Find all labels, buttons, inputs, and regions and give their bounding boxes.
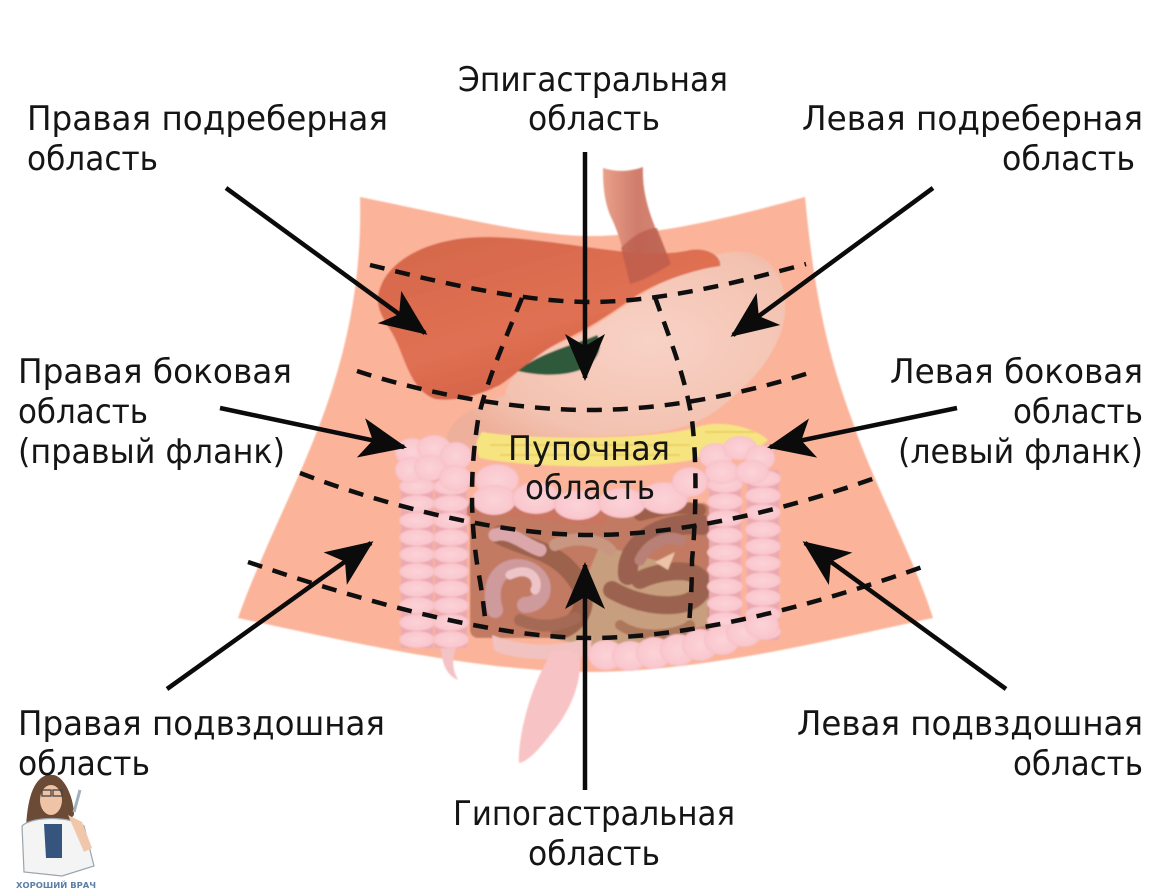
label: left flank [890, 352, 1143, 472]
gallbladder [518, 335, 600, 375]
label: epigastric: область [528, 99, 660, 139]
pancreas fat [476, 424, 768, 467]
label: umbilical [508, 429, 670, 508]
label: hypogastric: Гипогастральная [453, 794, 735, 834]
label: left iliac [797, 704, 1143, 784]
label: right flank [18, 352, 292, 472]
appendix [519, 650, 580, 763]
label: left flank: Левая боковая [890, 352, 1143, 392]
label: right iliac [18, 704, 385, 784]
arrow: right hypochondriac [226, 188, 425, 333]
arrow: epigastric [583, 152, 587, 378]
esophagus overlap on liver [621, 228, 671, 284]
label: right flank: (правый фланк) [18, 432, 285, 472]
panel: anatomy illustration [238, 167, 933, 763]
label: hypogastric: область [528, 834, 660, 874]
label: left hypochondriac: Левая подреберная [802, 99, 1143, 139]
liver [378, 237, 720, 400]
label: umbilical: область [525, 468, 655, 508]
logo: doctor mascot [16, 775, 96, 890]
small intestine block [470, 503, 710, 650]
label: epigastric: Эпигастральная [458, 60, 728, 100]
arrow: left flank [770, 408, 957, 447]
stomach and duodenum [446, 252, 785, 450]
arrow: left hypochondriac [733, 188, 933, 335]
torso silhouette [238, 197, 933, 672]
label: epigastric [458, 60, 728, 139]
label: left iliac: Левая подвздошная [797, 704, 1143, 744]
label: left flank: область [1013, 392, 1143, 432]
small tail of caecum [441, 645, 458, 680]
label: right iliac: область [18, 744, 150, 784]
arrow: right iliac [167, 543, 371, 689]
label: hypogastric [453, 794, 735, 874]
dashed region grid [248, 264, 925, 638]
label: umbilical: Пупочная [508, 429, 670, 469]
arrow: hypogastric [583, 565, 587, 790]
label: left flank: (левый фланк) [898, 432, 1143, 472]
label: right hypochondriac [27, 99, 388, 179]
label: right hypochondriac: Правая подреберная [27, 99, 388, 139]
label: right iliac: Правая подвздошная [18, 704, 385, 744]
sigmoid colon [588, 611, 779, 671]
arrow: right flank [220, 408, 404, 447]
label: right hypochondriac: область [27, 139, 158, 179]
transverse colon [472, 464, 708, 520]
esophagus [603, 167, 672, 284]
label: left hypochondriac [802, 99, 1143, 179]
descending colon [699, 436, 781, 646]
logo caption: ХОРОШИЙ ВРАЧ [16, 879, 96, 890]
ascending colon [395, 435, 472, 648]
label: right flank: область [18, 392, 148, 432]
pale intestine loop [492, 635, 592, 659]
arrow: left iliac [805, 543, 1006, 689]
label: left iliac: область [1013, 744, 1143, 784]
label: right flank: Правая боковая [18, 352, 292, 392]
label: left hypochondriac: область [1002, 139, 1135, 179]
